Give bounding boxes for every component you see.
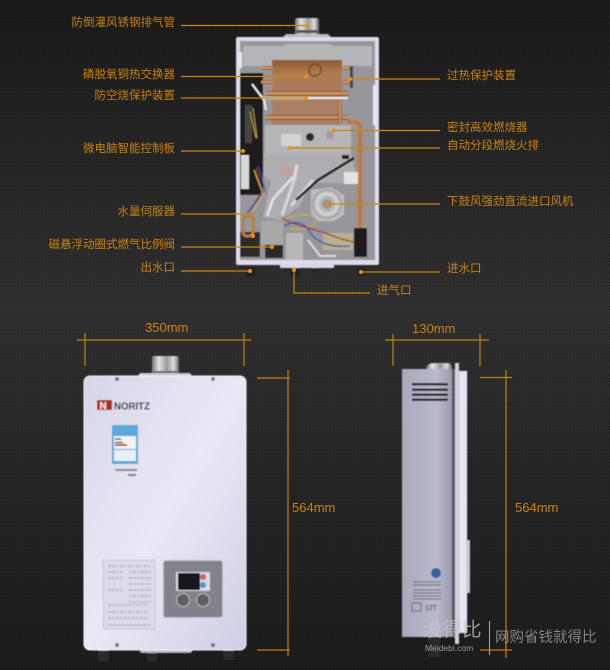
callout lines: left bbox=[181, 26, 307, 271]
logo bbox=[97, 400, 151, 412]
component labels: left: 磷脱氧铜热交换器 bbox=[83, 67, 175, 81]
component labels: left: 微电脑智能控制板 bbox=[83, 141, 175, 155]
component labels: right: 进气口 bbox=[377, 283, 412, 297]
warning sticker bbox=[103, 560, 155, 629]
front view of water heater bbox=[84, 356, 246, 661]
width label: 130mm bbox=[412, 321, 455, 336]
component labels: left: 防倒灌风锈钢排气管 bbox=[72, 15, 175, 29]
component labels: left: 防空烧保护装置 bbox=[94, 88, 175, 102]
opened water heater interior bbox=[236, 18, 379, 277]
fan bbox=[311, 187, 344, 221]
watermark: 网购省钱就得比 bbox=[495, 629, 596, 646]
vents bbox=[412, 383, 448, 401]
width label: 350mm bbox=[145, 320, 188, 335]
component labels: left bbox=[48, 15, 175, 274]
flue bbox=[426, 363, 452, 369]
mounting plate bbox=[452, 363, 470, 644]
gas valve and lower fittings bbox=[243, 216, 367, 260]
exhaust flue bbox=[283, 18, 331, 38]
lower connectors bbox=[98, 648, 234, 661]
component labels: right: 自动分段燃烧火排 bbox=[447, 138, 539, 152]
control panel bbox=[163, 560, 223, 618]
component labels: left: 磁悬浮动圈式燃气比例阀 bbox=[48, 237, 175, 251]
component labels: right: 密封高效燃烧器 bbox=[447, 120, 528, 134]
component labels: right bbox=[377, 68, 574, 297]
callout dots: left bbox=[241, 24, 309, 273]
screws bbox=[115, 377, 215, 647]
wiring bbox=[247, 166, 354, 256]
height label: 564mm bbox=[292, 500, 335, 515]
callout lines: right bbox=[290, 79, 440, 293]
casing bbox=[84, 376, 246, 650]
watermark: 没得比 bbox=[423, 619, 482, 641]
component labels: left: 出水口 bbox=[140, 260, 175, 274]
logo: NORITZ bbox=[114, 400, 151, 412]
body bbox=[402, 369, 452, 637]
energy label bbox=[112, 425, 138, 476]
rating plate bbox=[412, 568, 441, 612]
burner bbox=[263, 125, 358, 220]
logo: N bbox=[100, 401, 107, 412]
connector bbox=[428, 637, 440, 657]
heat exchanger bbox=[261, 44, 353, 126]
component labels: right: 下鼓风强劲直流进口风机 bbox=[447, 194, 574, 208]
rating plate: 12T bbox=[425, 605, 438, 612]
flue bbox=[137, 356, 193, 377]
callout dots: right bbox=[288, 77, 363, 274]
copper water pipe bbox=[347, 122, 360, 233]
connectors bbox=[246, 264, 366, 277]
front view dimensions bbox=[77, 320, 335, 656]
outer casing bbox=[236, 37, 379, 265]
height label: 564mm bbox=[515, 500, 558, 515]
watermark bbox=[423, 619, 596, 655]
component labels: left: 水量伺服器 bbox=[118, 205, 175, 218]
watermark: Meidebi.com bbox=[425, 643, 473, 653]
side view of water heater bbox=[402, 363, 470, 657]
side view dimensions bbox=[385, 321, 558, 658]
component labels: right: 过热保护装置 bbox=[447, 68, 516, 82]
control board bbox=[240, 73, 266, 257]
component labels: right: 进水口 bbox=[447, 262, 482, 275]
